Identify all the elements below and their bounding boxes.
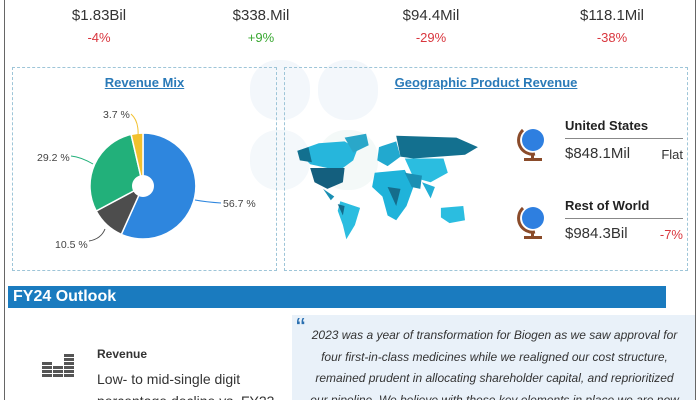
donut chart: 29.2 % — [37, 152, 70, 164]
icon: coins — [42, 354, 74, 377]
donut chart: 3.7 % — [103, 109, 130, 121]
donut chart — [37, 109, 256, 251]
heading bar: FY24 outlook: FY24 Outlook — [13, 288, 116, 305]
quote box: “ — [296, 312, 305, 343]
donut chart: 56.7 % — [223, 198, 256, 210]
kpi: third metric: -29% — [416, 30, 446, 45]
text: united states: $848.1Mil — [565, 145, 630, 162]
text: revenue outlook: Low- to mid-single digit — [97, 371, 240, 387]
text: united states: United States — [565, 118, 648, 133]
icon: globe US — [517, 128, 544, 161]
text: rest of world — [565, 198, 683, 242]
heading bar: FY24 outlook — [8, 286, 666, 308]
heading: geographic: Geographic Product Revenue — [395, 75, 577, 90]
text: revenue outlook: Revenue — [97, 347, 147, 361]
kpi: second metric — [232, 7, 289, 45]
kpi: third metric — [402, 7, 459, 45]
kpi: second metric: +9% — [248, 30, 274, 45]
kpi: fourth metric: -38% — [597, 30, 627, 45]
text: united states — [565, 118, 683, 162]
text: rest of world: Rest of World — [565, 198, 649, 213]
world map — [297, 134, 478, 240]
donut chart: 10.5 % — [55, 239, 88, 251]
icon: globe ROW — [517, 206, 544, 239]
kpi: revenue — [72, 7, 126, 45]
text: rest of world: -7% — [660, 227, 683, 242]
kpi: second metric: $338.Mil — [233, 7, 289, 24]
panel: revenue mix — [12, 67, 277, 271]
background watermark — [250, 60, 378, 190]
kpi: fourth metric: $118.1Mil — [580, 7, 644, 24]
kpi: fourth metric — [580, 7, 644, 45]
kpi: revenue: $1.83Bil — [72, 7, 126, 24]
kpi: third metric: $94.4Mil — [403, 7, 459, 24]
text: revenue outlook — [97, 347, 274, 400]
kpi: revenue: -4% — [87, 30, 111, 45]
panel: geographic product revenue — [284, 67, 688, 271]
heading: revenue mix: Revenue Mix — [105, 75, 184, 90]
text: rest of world: $984.3Bil — [565, 225, 628, 242]
text: united states: Flat — [661, 147, 683, 162]
